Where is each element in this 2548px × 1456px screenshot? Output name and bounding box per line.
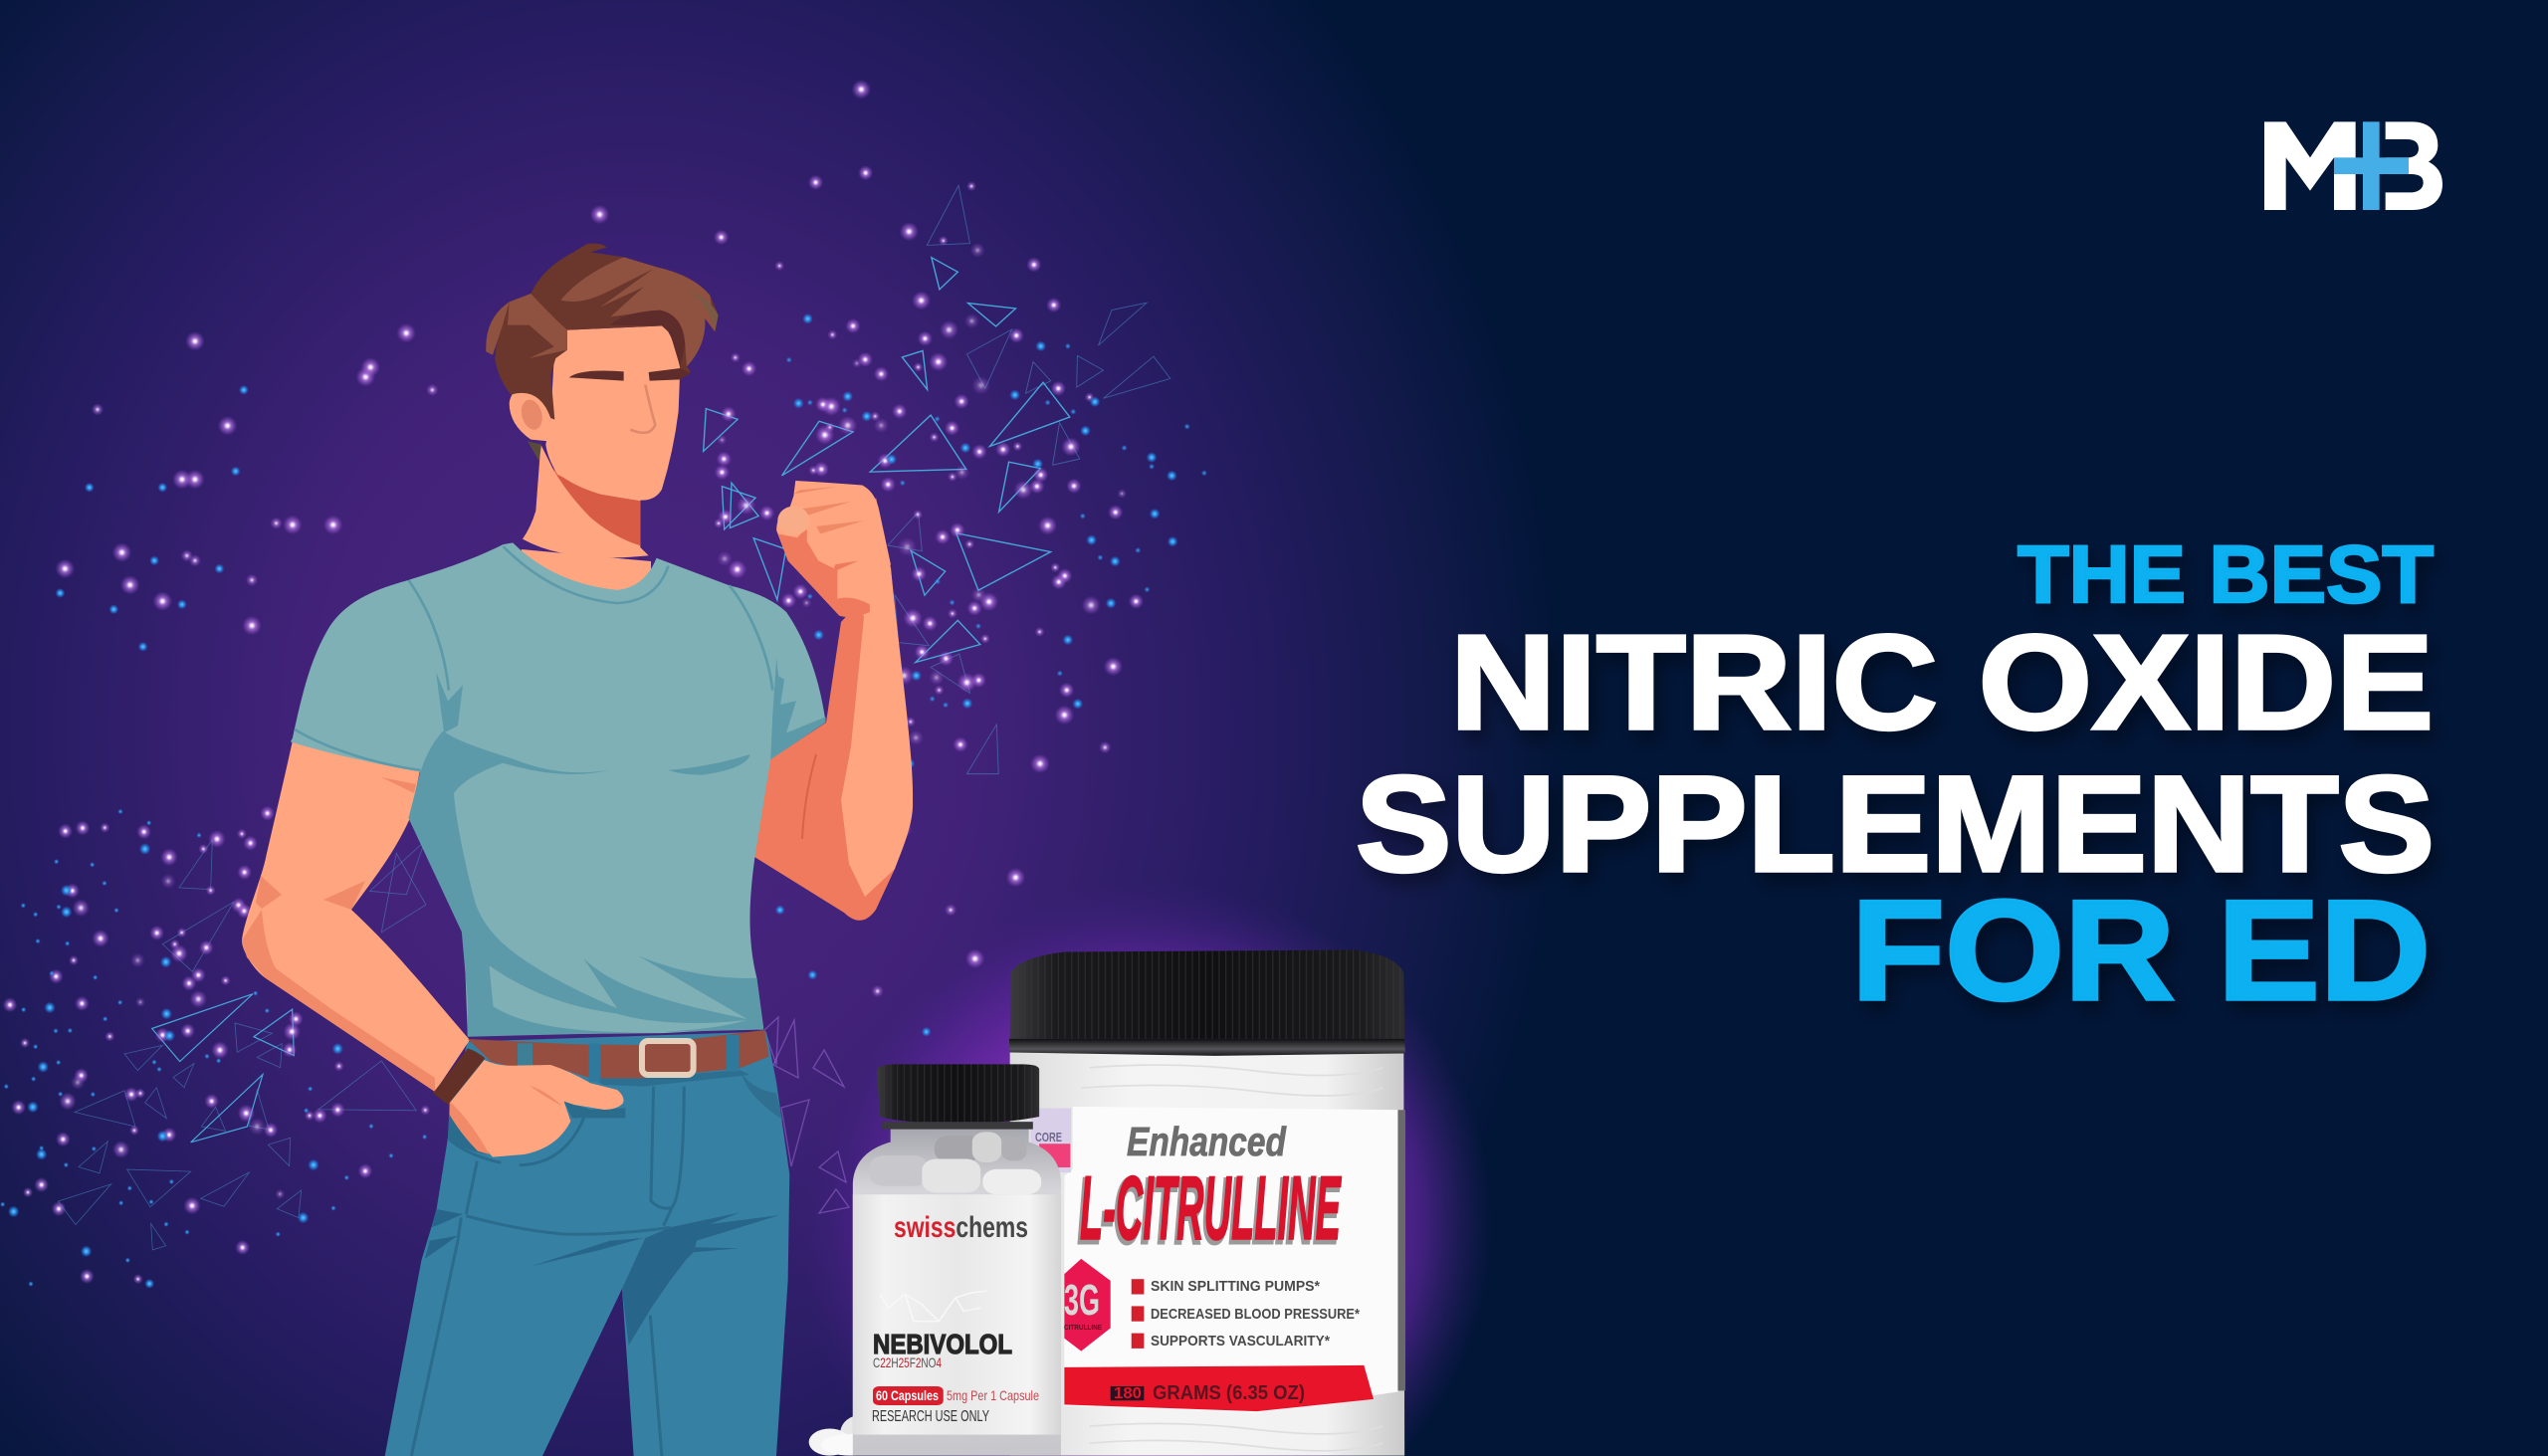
star field: upper right cluster <box>704 165 1207 774</box>
Enhanced: Enhanced <box>1127 1119 1287 1164</box>
60 Capsules: 60 Capsules <box>876 1387 939 1403</box>
benefits: DECREASED BLOOD PRESSURE* <box>1151 1306 1360 1323</box>
molecule sketch <box>880 1291 987 1322</box>
title line: THE BEST: THE BEST <box>2017 529 2434 620</box>
jar lid <box>1010 949 1404 1039</box>
weight text: GRAMS (6.35 OZ) <box>1153 1382 1305 1404</box>
3G badge text: CITRULLINE <box>1064 1325 1102 1332</box>
belt and buckle <box>468 1030 769 1087</box>
title line: FOR ED: FOR ED <box>1851 872 2431 1030</box>
hand in pocket and wristband <box>433 1048 623 1157</box>
star field: lower left cluster <box>0 806 430 1287</box>
title <box>1356 529 2435 1030</box>
side tab <box>1031 1109 1071 1172</box>
neck shadow <box>552 468 640 545</box>
formula: C22H25F2NO4 <box>873 1354 942 1370</box>
eyes and nose <box>569 368 691 433</box>
weight box <box>1111 1386 1144 1400</box>
3G badge text <box>1064 1276 1102 1332</box>
dose: 5mg Per 1 Capsule <box>947 1387 1039 1403</box>
star field: upper left and centre scatter <box>56 80 1111 1289</box>
title line: NITRIC OXIDE: NITRIC OXIDE <box>1450 607 2434 757</box>
research use only: RESEARCH USE ONLY <box>872 1408 989 1425</box>
right label edge <box>1397 1110 1405 1390</box>
logo: M+B <box>2264 121 2442 210</box>
checkboxes <box>1132 1279 1144 1349</box>
faint triangles beside bottle <box>764 1017 849 1213</box>
jar lid rim <box>1009 1039 1405 1056</box>
benefits: SUPPORTS VASCULARITY* <box>1151 1333 1330 1350</box>
title line: SUPPLEMENTS: SUPPLEMENTS <box>1356 748 2435 901</box>
back hair <box>528 441 541 461</box>
benefits: SKIN SPLITTING PUMPS* <box>1151 1278 1320 1295</box>
bottle label <box>853 1194 1061 1435</box>
product: L-Citrulline jar: L-CITRULLINE <box>1080 1158 1342 1259</box>
pink tab <box>1039 1144 1070 1167</box>
3G badge text: 3G <box>1064 1276 1100 1325</box>
capsules <box>870 1132 1041 1194</box>
hexagon badge <box>1064 1259 1111 1352</box>
product: Nebivolol bottle <box>853 1064 1061 1456</box>
swisschems brand: swisschems <box>894 1211 1028 1244</box>
neck base under shirt <box>522 549 651 597</box>
fist <box>776 481 891 617</box>
shirt <box>291 542 826 1037</box>
neck <box>523 445 649 557</box>
jeans <box>385 1032 789 1456</box>
product: L-Citrulline jar <box>1009 949 1405 1456</box>
jar label <box>1064 1107 1398 1412</box>
CORE tab text: CORE <box>1035 1130 1062 1144</box>
product glow <box>796 881 1493 1456</box>
jar body <box>1010 1052 1404 1456</box>
weight text: 180 <box>1114 1385 1142 1402</box>
red band <box>1064 1365 1374 1411</box>
L-CITRULLINE <box>1078 1158 1342 1262</box>
head <box>486 244 719 557</box>
face <box>545 325 680 501</box>
bottle lid ribs <box>877 1064 1039 1124</box>
glass body <box>853 1126 1061 1456</box>
hair <box>486 244 719 420</box>
benefits <box>1151 1278 1360 1350</box>
left arm <box>242 740 470 1092</box>
bottle lid <box>877 1064 1039 1124</box>
product: L-Citrulline jar: L-CITRULLINE <box>1078 1161 1340 1262</box>
jar lid ribs <box>1010 949 1404 1039</box>
neck ring <box>882 1122 1033 1130</box>
capsule pills spilled <box>809 1414 886 1456</box>
NEBIVOLOL: NEBIVOLOL <box>873 1329 1012 1359</box>
ear <box>510 386 550 441</box>
capsule count pill <box>873 1386 944 1405</box>
right arm <box>754 498 913 921</box>
illustration: man with raised fist <box>242 244 913 1456</box>
jar texture <box>1081 1065 1382 1451</box>
